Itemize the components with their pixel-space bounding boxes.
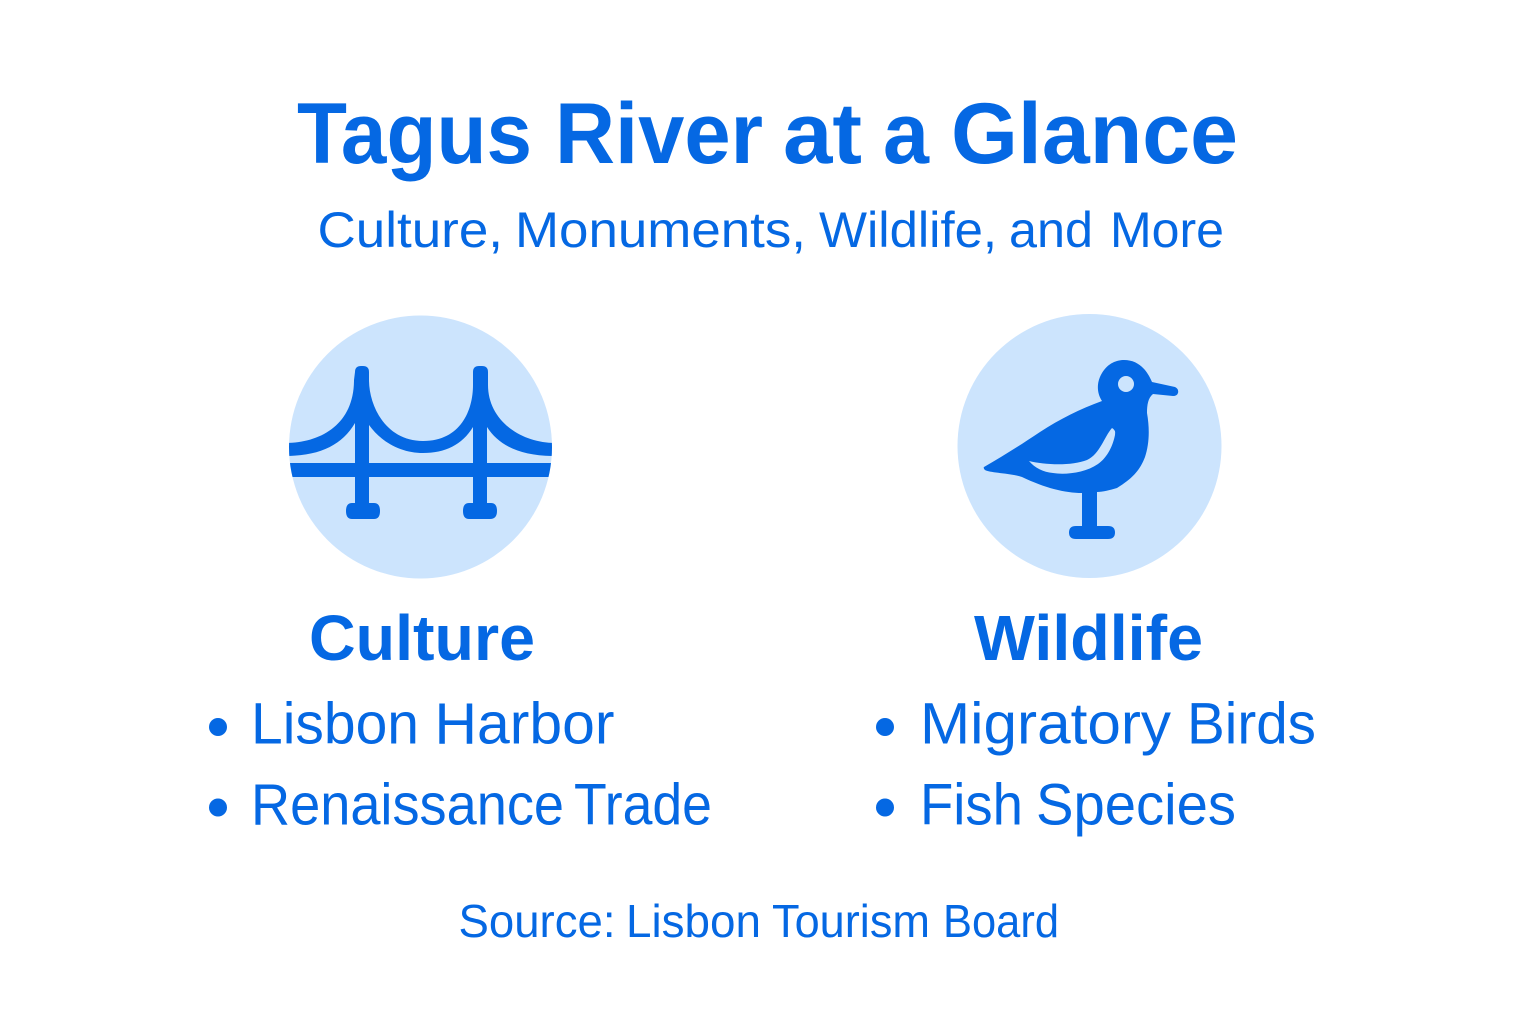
title bbox=[297, 86, 1238, 182]
list: wildlife items bbox=[876, 692, 1316, 838]
title: River bbox=[555, 86, 763, 182]
list: wildlife items: Species bbox=[1036, 772, 1236, 838]
subtitle: Wildlife, bbox=[819, 202, 997, 258]
subtitle bbox=[318, 202, 1224, 258]
source note: Tourism bbox=[772, 895, 930, 947]
source note bbox=[458, 895, 1059, 947]
panel: culture bbox=[209, 316, 712, 838]
list: wildlife items: Migratory bbox=[920, 692, 1171, 756]
list: culture items bbox=[209, 692, 712, 838]
list: culture items: Trade bbox=[574, 772, 712, 838]
icon: bird in circle bbox=[958, 314, 1222, 578]
icon: bridge in circle bbox=[285, 316, 557, 578]
title: at bbox=[783, 86, 862, 182]
list: culture items: Harbor bbox=[434, 692, 614, 756]
list: wildlife items: Fish bbox=[920, 772, 1023, 838]
source note: Lisbon bbox=[626, 895, 761, 947]
title: a bbox=[883, 86, 930, 182]
panel: wildlife bbox=[876, 314, 1316, 838]
source note: Board bbox=[943, 895, 1059, 947]
heading: wildlife: Wildlife bbox=[974, 602, 1203, 674]
list: wildlife items: Birds bbox=[1187, 692, 1316, 756]
subtitle: More bbox=[1110, 202, 1224, 258]
heading: culture: Culture bbox=[309, 602, 535, 674]
subtitle: Monuments, bbox=[515, 202, 806, 258]
source note: Source: bbox=[458, 895, 616, 947]
title: Tagus bbox=[297, 86, 532, 182]
title: Glance bbox=[951, 86, 1238, 182]
subtitle: Culture, bbox=[318, 202, 503, 258]
list: culture items: Renaissance bbox=[251, 772, 564, 838]
list: culture items: Lisbon bbox=[251, 692, 419, 756]
subtitle: and bbox=[1009, 202, 1093, 258]
